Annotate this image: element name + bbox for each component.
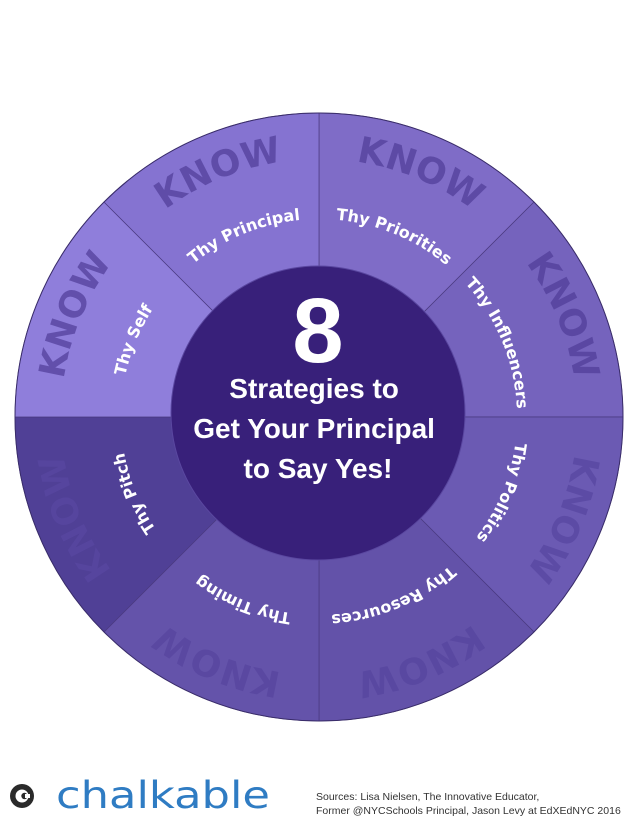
big number 8: 8 [292,280,344,382]
KNOW watermarks: KNOW [153,136,276,208]
strategy labels: Thy Influencers [468,275,526,408]
title text: to Say Yes! [244,453,392,484]
strategy labels: Thy Timing [196,574,290,625]
sector: Thy Resources [319,417,534,721]
strategy labels: Thy Self [114,302,152,374]
strategy labels: Thy Politics [477,444,527,542]
title text: Strategies to [229,373,399,404]
strategy labels: Thy Resources [332,568,458,624]
KNOW watermarks: KNOW [32,452,119,589]
KNOW watermarks: KNOW [362,626,485,698]
center circle with title [171,266,465,560]
logo icon [10,784,34,808]
strategy labels [114,208,527,625]
sector: Thy Priorities [319,113,534,417]
sector: Thy Principal [104,113,319,417]
title text: Get Your Principal [193,413,435,444]
sector: Thy Self [15,202,319,417]
strategy labels: Thy Principal [186,208,299,262]
sector: Thy Timing [104,417,319,721]
sector: Thy Politics [319,417,623,632]
outer ring outline [15,113,623,721]
KNOW watermarks [38,136,600,698]
strategy labels: Thy Priorities [337,208,451,264]
KNOW watermarks: KNOW [151,628,278,698]
KNOW watermarks: KNOW [530,458,600,585]
sector: Thy Influencers [319,202,623,417]
sources: Sources: Lisa Nielsen, The Innovative Educator, [316,791,539,803]
sources: Former @NYCSchools Principal, Jason Levy at EdXEdNYC 2016 [316,805,621,817]
sector: Thy Pitch [15,417,319,632]
KNOW watermarks: KNOW [359,136,487,206]
logo wordmark: chalkable [56,774,270,817]
KNOW watermarks: KNOW [38,248,108,376]
strategy labels: Thy Pitch [114,454,154,536]
KNOW watermarks: KNOW [528,250,600,374]
